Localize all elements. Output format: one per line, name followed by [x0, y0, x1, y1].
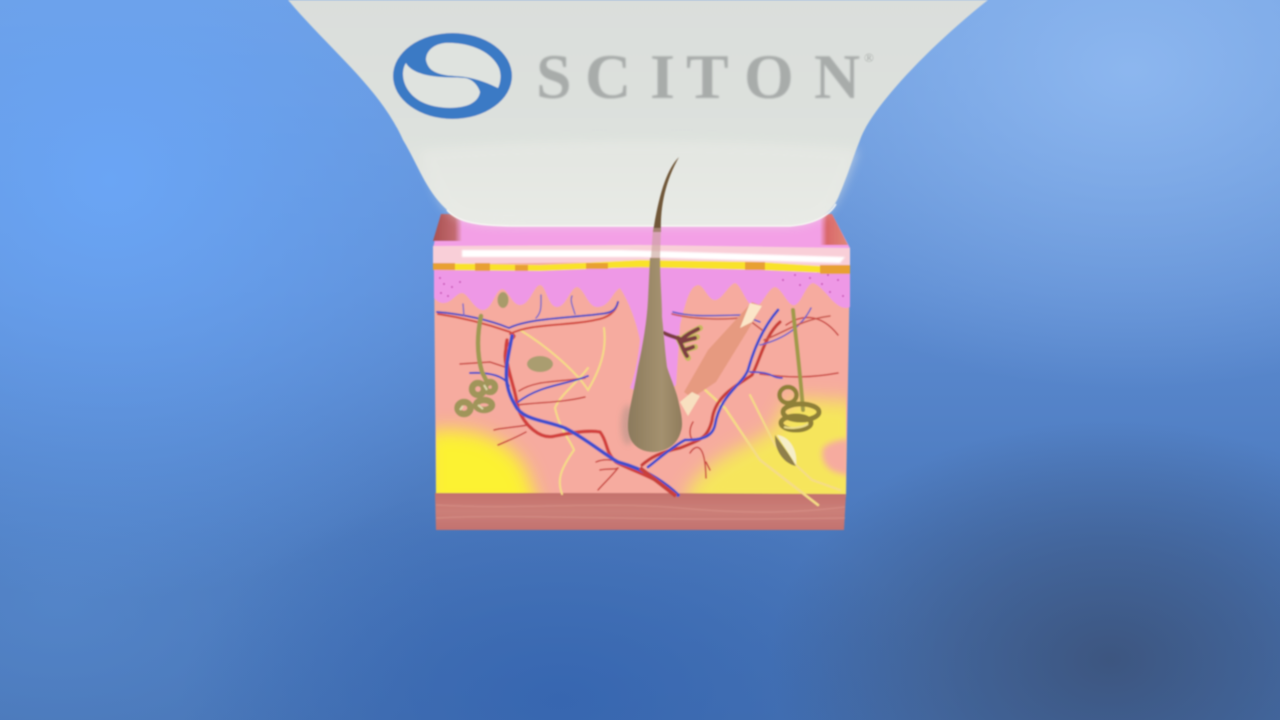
- logo: SCITON wordmark: I: [650, 41, 675, 112]
- illustration: handpiece on skin block: [288, 0, 988, 531]
- nerves: pale yellow: [520, 328, 840, 505]
- hair: [621, 157, 682, 452]
- right sweat gland: [780, 310, 819, 430]
- handpiece: lower highlight: [420, 141, 858, 226]
- vessels: blue side branch: [470, 373, 588, 402]
- hair: shaft above skin: [653, 157, 679, 232]
- skin: white surface band: [433, 245, 850, 268]
- skin: yellow-orange stratum band: [433, 260, 850, 274]
- logo: SCITON wordmark: T: [686, 41, 729, 112]
- logo: SCITON wordmark: N: [814, 41, 860, 112]
- vessels: main blue vessel left: [506, 336, 678, 495]
- skin: left fat layer: [425, 430, 540, 510]
- hair: follicle and bulb: [628, 258, 682, 452]
- skin: speckles in epidermis: [439, 271, 844, 297]
- handpiece: body: [288, 0, 988, 226]
- handpiece: rim line: [447, 204, 836, 226]
- vessels: right upper plexus: [672, 308, 830, 378]
- left sweat gland: [458, 316, 495, 414]
- skin: muscle layer: [435, 493, 846, 530]
- skin block: [425, 214, 860, 530]
- vessels: crossing bundle at bottom: [640, 468, 676, 496]
- handpiece: [288, 0, 988, 226]
- logo: SCITON wordmark: C: [585, 41, 631, 112]
- skin: top translucent pink layer: [433, 214, 850, 248]
- hair: bulb shadow: [621, 405, 635, 445]
- skin: right fat layer: [685, 398, 860, 510]
- hair: shaft crossing pink layer: [651, 228, 661, 258]
- sebaceous gland: [664, 328, 700, 358]
- vessels: right red vessel: [642, 322, 780, 465]
- oval cell upper: [498, 292, 508, 308]
- logo: Sciton mark: [393, 33, 512, 119]
- skin: dermis: [434, 262, 850, 497]
- fat lobe: [775, 435, 796, 466]
- vessels: capillaries red: [460, 317, 838, 490]
- oval cell lower: [527, 356, 553, 372]
- logo: SCITON wordmark: S: [536, 41, 572, 112]
- logo: registered mark: ®: [864, 50, 874, 65]
- vessels: main red vessel left: [506, 340, 672, 490]
- vessels: upper blue and red plexus left: [437, 295, 618, 390]
- hair arrector muscle: [680, 302, 762, 416]
- logo: SCITON wordmark: O: [744, 41, 794, 112]
- vessels: right blue vessel: [648, 310, 778, 467]
- skin: epidermis pink with papillae: [434, 268, 850, 400]
